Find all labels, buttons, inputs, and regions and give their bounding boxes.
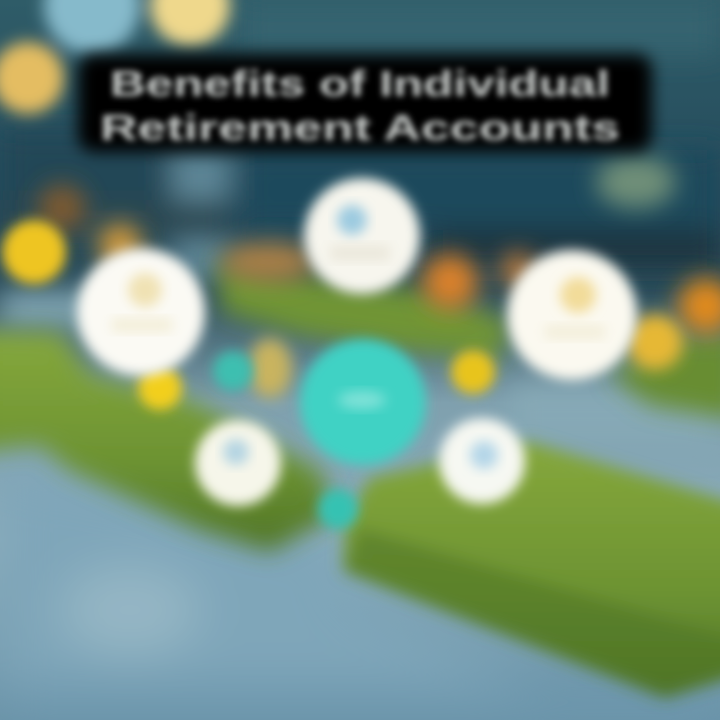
small teal dot left: [213, 351, 253, 391]
green hedge: large front block: [343, 442, 720, 698]
yellow coin right: [627, 314, 683, 370]
green hedge: back row: [218, 262, 510, 360]
centre teal circle: [300, 339, 426, 465]
circle: left: [77, 248, 205, 376]
green hedge: left block: [0, 330, 335, 552]
water surface foreground: [0, 460, 720, 720]
title text: Benefits of Individual: [110, 63, 610, 104]
title banner: [78, 54, 652, 152]
orange coin beside teal: [248, 338, 292, 398]
circle: right: [507, 250, 637, 380]
yellow coin lower left: [138, 366, 182, 410]
title text: Retirement Accounts: [100, 107, 620, 148]
title text: [100, 63, 620, 148]
top coins: [0, 0, 230, 114]
faint badge upper right: [596, 156, 676, 208]
small teal dot bottom: [318, 489, 358, 529]
circle: lower right: [439, 418, 525, 504]
circle: lower left: [195, 420, 281, 506]
circle: top centre: [304, 178, 420, 294]
green hedge: right back: [610, 335, 720, 420]
orange flowers row: [38, 184, 720, 334]
yellow coin left: [2, 220, 66, 284]
yellow coin centre right: [451, 350, 495, 394]
